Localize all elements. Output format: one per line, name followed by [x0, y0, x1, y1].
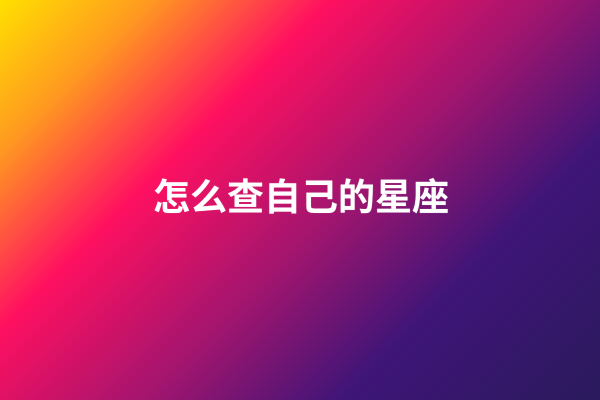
- title: 怎么查自己的星座: [153, 177, 449, 218]
